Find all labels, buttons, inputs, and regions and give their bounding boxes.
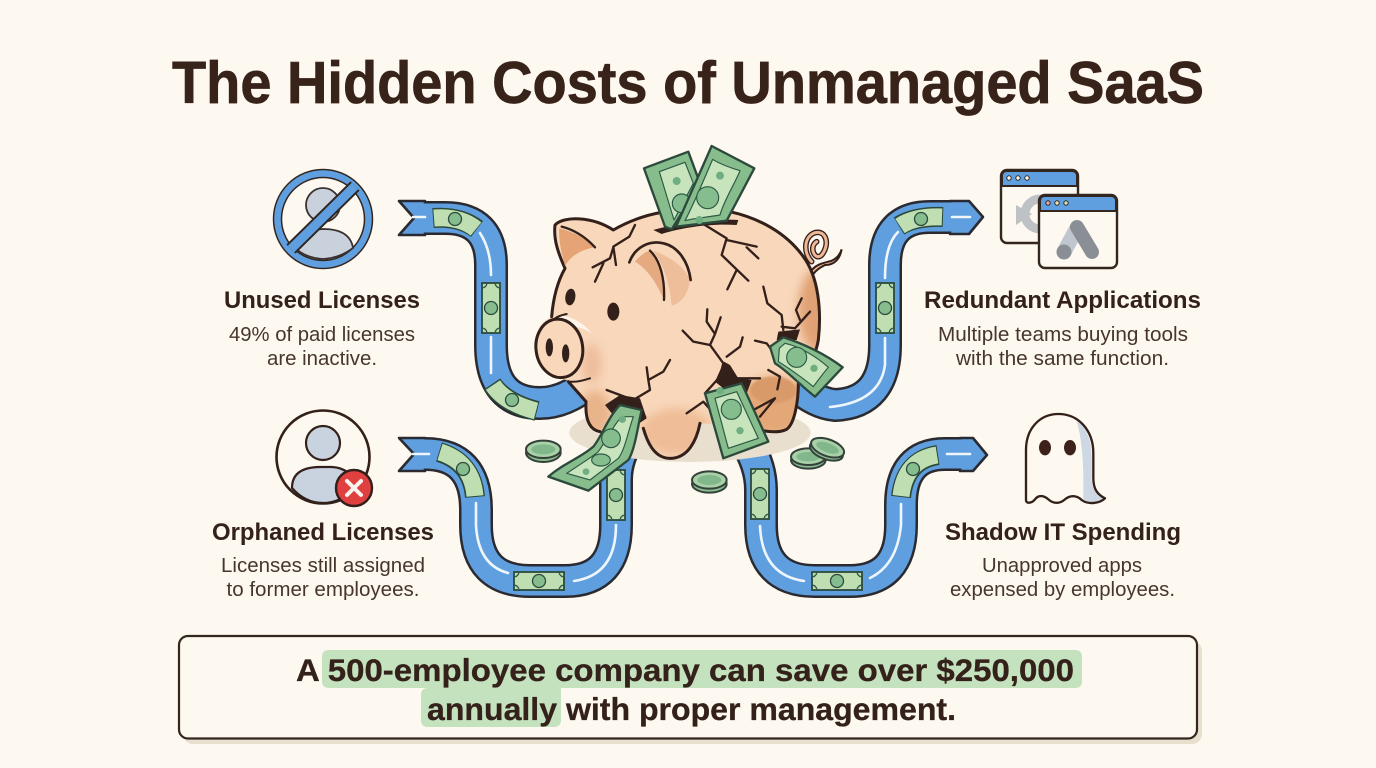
highlight: savings figure [322,650,1082,727]
icon: ghost [1026,414,1105,503]
text: shadow it spending [945,519,1181,601]
text: shadow it spending: Unapproved apps [982,555,1142,577]
icon: unused license, person with prohibition sign [278,174,368,264]
text: redundant applications [924,287,1201,370]
text: redundant applications: Multiple teams buying tools [938,324,1188,346]
inner left ear [559,228,594,266]
icon: orphaned license, person with red x badge [276,410,372,506]
pig body [535,212,820,458]
text: unused licenses: 49% of paid licenses [229,324,415,346]
money: front bill in slot [676,146,754,227]
icon: coins on floor [526,434,847,493]
inner right ear [635,251,664,300]
text: shadow it spending: expensed by employees. [950,579,1175,601]
pig outline [552,212,820,458]
snout [532,314,592,382]
text: orphaned licenses [212,519,434,601]
text: unused licenses [224,287,420,370]
ribbon: top left money flow [399,201,590,411]
money: right bill escaping [770,337,843,397]
text: unused licenses: Unused Licenses [224,287,420,314]
cracks [593,225,810,432]
illustration: cracked piggy bank with escaping money [526,146,847,493]
money: back bill in slot [644,152,700,229]
ribbon: bottom left money flow [399,425,640,590]
floor shadow [569,403,811,462]
text: redundant applications: with the same function. [955,348,1169,370]
eyes [564,288,576,306]
text: redundant applications: Redundant Applications [924,287,1201,314]
text: unused licenses: are inactive. [267,348,377,370]
text: orphaned licenses: Licenses still assigned [221,555,425,577]
ribbon: bottom right money flow [745,438,987,590]
text: orphaned licenses: to former employees. [226,579,420,601]
ribbon: top right money flow [795,201,983,407]
money: left bill escaping [548,405,642,491]
tail [806,232,842,274]
coin slot [653,220,738,234]
callout: savings statement [179,636,1202,744]
text: shadow it spending: Shadow IT Spending [945,519,1181,546]
title: The Hidden Costs of Unmanaged SaaS [172,50,1204,116]
money: middle bill escaping [705,383,768,458]
callout: savings statement: A 500-employee company can save over $250,000 [296,652,1074,688]
icon: overlapping application windows [1001,170,1117,268]
pig shading [578,267,842,455]
text: orphaned licenses: Orphaned Licenses [212,519,434,546]
callout: savings statement: annually with proper management. [427,691,956,727]
